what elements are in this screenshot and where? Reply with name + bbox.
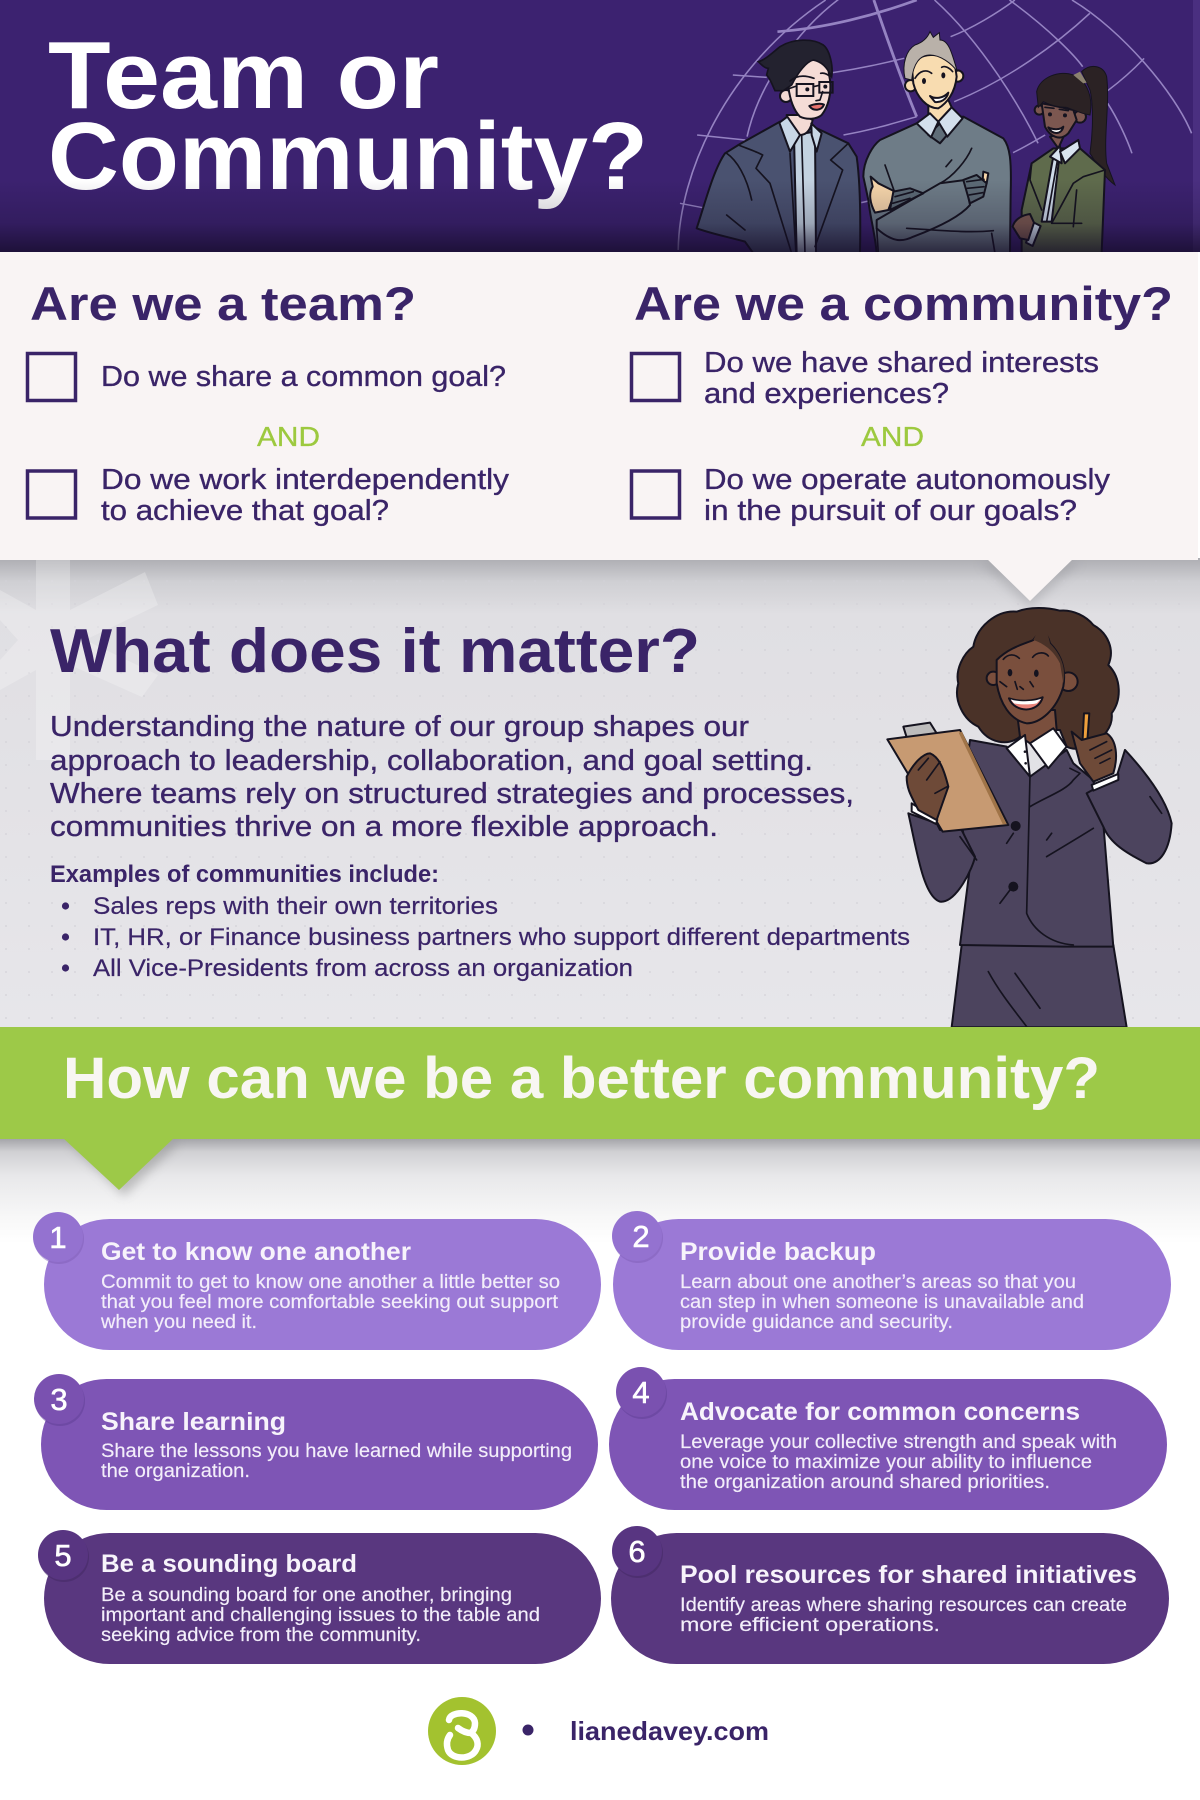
number badge 3: 3 — [50, 1382, 68, 1417]
bullet separator — [522, 1724, 534, 1736]
tip 4 card: the organization around shared priorities. — [680, 1472, 1050, 1493]
text block: what does it matter: All Vice-Presidents from across an organization — [93, 955, 633, 982]
tip 1 card: when you need it. — [100, 1312, 257, 1333]
tip 1 card: Commit to get to know one another a little better so — [101, 1272, 560, 1293]
tip 6 card — [611, 1526, 1169, 1664]
decorative asterisk watermark — [0, 558, 158, 760]
number badge 5 — [38, 1530, 89, 1582]
tip 5 card: Be a sounding board — [101, 1550, 357, 1578]
illustration: man with glasses — [697, 40, 860, 253]
column: are we a community: Do we operate autonomously — [704, 464, 1111, 496]
text block: what does it matter — [50, 617, 910, 982]
column: are we a community: AND — [861, 421, 924, 452]
title: Community? — [48, 103, 648, 210]
column: are we a team: AND — [257, 421, 320, 452]
column: are we a community — [632, 277, 1173, 527]
banner: how can we be a better community: How can we be a better community? — [63, 1046, 1100, 1111]
tip 5 card: Be a sounding board for one another, bringing — [101, 1585, 512, 1606]
illustration: man in sweater — [863, 32, 1011, 253]
tip 2 card: can step in when someone is unavailable and — [680, 1292, 1084, 1313]
tip 1 card: that you feel more comfortable seeking out support — [101, 1292, 559, 1313]
banner: how can we be a better community — [0, 1027, 1200, 1196]
tip 4 card: Advocate for common concerns — [680, 1398, 1080, 1426]
title: Team or — [48, 22, 439, 129]
section: better community background — [0, 1139, 1200, 1244]
tip 4 card — [609, 1367, 1167, 1510]
section: what does it matter background — [0, 558, 1200, 1028]
column: are we a team: to achieve that goal? — [101, 495, 389, 527]
number badge 2 — [612, 1211, 663, 1263]
column: are we a community: in the pursuit of our goals? — [704, 495, 1077, 527]
column: are we a team: Are we a team? — [30, 277, 416, 330]
tip 2 card — [612, 1211, 1171, 1350]
column: are we a community: and experiences? — [704, 378, 949, 410]
column: are we a team — [28, 277, 510, 527]
panel: header — [0, 0, 1200, 253]
text block: what does it matter: IT, HR, or Finance business partners who support different departments — [93, 924, 910, 951]
number badge 2: 2 — [632, 1219, 650, 1254]
text block: what does it matter: Where teams rely on structured strategies and processes, — [50, 778, 854, 810]
text block: what does it matter: Understanding the nature of our group shapes our — [50, 711, 749, 743]
tip 1 card — [33, 1212, 601, 1350]
tip 3 card: the organization. — [101, 1461, 250, 1482]
number badge 4 — [616, 1367, 667, 1419]
tip 3 card — [34, 1374, 598, 1510]
number badge 3 — [34, 1374, 85, 1426]
tip 3 card: Share the lessons you have learned while supporting — [101, 1441, 572, 1462]
icon: logo — [428, 1697, 496, 1765]
number badge 4: 4 — [632, 1375, 650, 1410]
number badge 5: 5 — [54, 1538, 72, 1573]
tip 5 card: important and challenging issues to the table and — [101, 1605, 540, 1626]
tip 4 card: Leverage your collective strength and speak with — [680, 1432, 1117, 1453]
tip 2 card: provide guidance and security. — [680, 1312, 953, 1333]
tip 6 card: more efficient operations. — [680, 1615, 940, 1636]
text block: what does it matter: Sales reps with their own territories — [93, 893, 498, 920]
tip 6 card: Identify areas where sharing resources can create — [680, 1595, 1127, 1616]
number badge 6 — [612, 1526, 663, 1578]
globe line art — [678, 0, 1192, 250]
number badge 6: 6 — [628, 1534, 646, 1569]
illustration: woman with ponytail — [1013, 66, 1115, 253]
column: are we a team: Do we work interdependently — [101, 464, 510, 496]
tip 4 card: one voice to maximize your ability to influence — [680, 1452, 1092, 1473]
column: are we a team: Do we share a common goal? — [101, 361, 506, 393]
text block: what does it matter: approach to leadership, collaboration, and goal setting. — [50, 745, 813, 777]
tip 5 card — [38, 1530, 601, 1664]
tip 1 card: Get to know one another — [101, 1238, 411, 1266]
tip 5 card: seeking advice from the community. — [101, 1625, 421, 1646]
text block: what does it matter: Examples of communities include: — [50, 861, 439, 888]
footer — [428, 1697, 769, 1765]
number badge 1: 1 — [49, 1220, 67, 1255]
panel: team and community checklists — [0, 252, 1198, 601]
text block: what does it matter: communities thrive on a more flexible approach. — [50, 811, 718, 843]
tip 6 card: Pool resources for shared initiatives — [680, 1561, 1137, 1589]
tip 3 card: Share learning — [101, 1408, 286, 1436]
tip 2 card: Provide backup — [680, 1238, 876, 1266]
column: are we a community: Do we have shared interests — [704, 347, 1099, 379]
tip 2 card: Learn about one another’s areas so that you — [680, 1272, 1076, 1293]
illustration: woman with clipboard — [887, 608, 1172, 1027]
number badge 1 — [33, 1212, 84, 1264]
website: lianedavey.com — [570, 1716, 769, 1746]
text block: what does it matter: What does it matter? — [50, 617, 700, 686]
title — [48, 22, 648, 210]
column: are we a community: Are we a community? — [634, 277, 1173, 330]
